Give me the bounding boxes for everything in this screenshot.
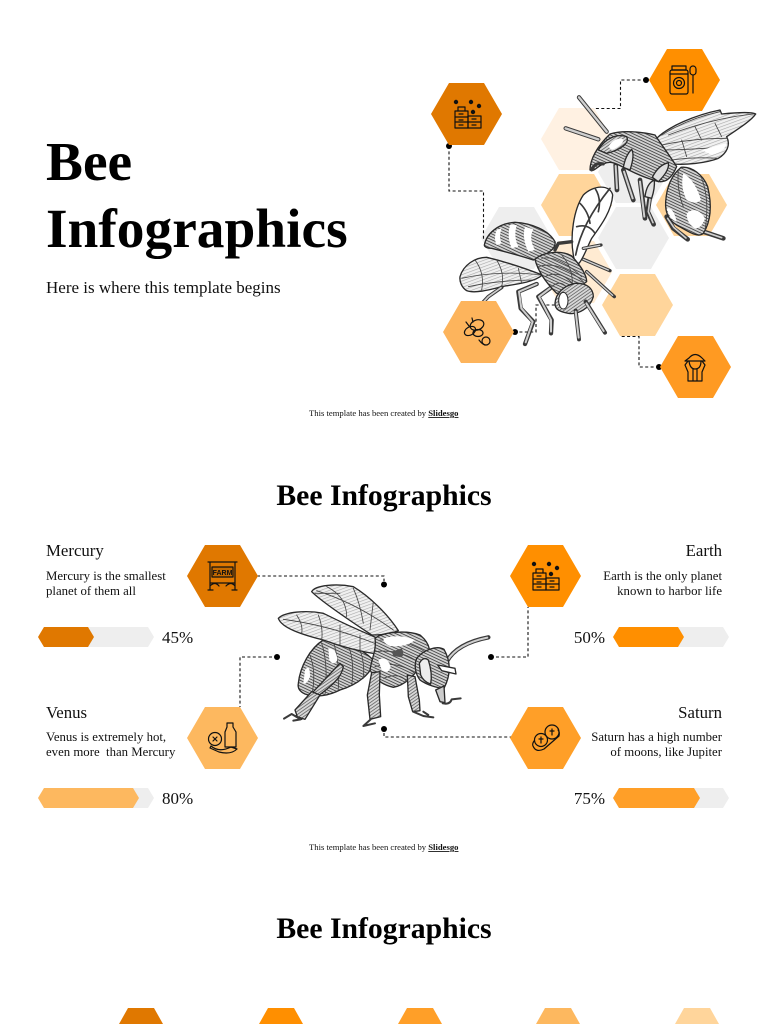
Venus hexagon with honey products icon <box>187 707 258 769</box>
Saturn percent: 75% <box>574 789 605 808</box>
slide title: Bee Infographics: Infographics <box>46 198 348 259</box>
hexagon with icon: hive boxes <box>431 83 502 145</box>
Earth name: Earth <box>686 541 723 560</box>
panel: Venus <box>38 703 258 808</box>
illustration: upper flying bee <box>566 97 756 239</box>
hexagon with icon: beekeeper <box>660 336 731 398</box>
footer credit, first slide: This template has been created by Slidesgo <box>309 408 458 418</box>
Saturn description: of moons, like Jupiter <box>610 745 723 759</box>
Saturn hexagon with honeycomb icon <box>510 707 581 769</box>
Mercury percent: 45% <box>162 628 193 647</box>
illustration: lower flying bee <box>460 187 614 344</box>
subtitle: Here is where this template begins <box>46 278 281 297</box>
panel: Mercury <box>38 541 258 647</box>
Mercury description: planet of them all <box>46 584 136 598</box>
hexagon with icon: honey jar and dipper <box>649 49 720 111</box>
Mercury hexagon with farm sign icon: FARM <box>213 570 233 577</box>
panel: Saturn <box>510 703 729 808</box>
Earth progress bar 50% <box>613 627 729 647</box>
hexagon with icon: bee <box>443 301 514 363</box>
heading: third slide: Bee Infographics <box>276 913 492 945</box>
Earth hexagon with hive boxes icon <box>510 545 581 607</box>
Venus percent: 80% <box>162 789 193 808</box>
connector lines, hero <box>446 77 662 370</box>
Venus name: Venus <box>46 703 87 722</box>
Venus description: even more than Mercury <box>46 745 176 759</box>
Saturn progress bar 75% <box>613 788 729 808</box>
row of hexagons, third slide <box>119 1008 719 1024</box>
honeycomb background hexagons <box>481 108 727 336</box>
Earth description: Earth is the only planet <box>603 569 722 583</box>
Saturn name: Saturn <box>678 703 723 722</box>
heading: second slide: Bee Infographics <box>276 480 492 512</box>
slide title: Bee Infographics: Bee <box>46 131 132 192</box>
Venus description: Venus is extremely hot, <box>46 730 166 744</box>
Mercury progress bar 45% <box>38 627 154 647</box>
connector lines, second slide <box>240 576 528 737</box>
Saturn description: Saturn has a high number <box>591 730 722 744</box>
illustration: central bee <box>278 585 488 726</box>
Mercury hexagon with farm sign icon <box>187 545 258 607</box>
Earth percent: 50% <box>574 628 605 647</box>
Venus progress bar 80% <box>38 788 154 808</box>
panel: Earth <box>510 541 729 647</box>
Mercury name: Mercury <box>46 541 104 560</box>
Earth description: known to harbor life <box>617 584 722 598</box>
Mercury description: Mercury is the smallest <box>46 569 166 583</box>
slide title: Bee Infographics <box>46 131 348 259</box>
footer credit, second slide: This template has been created by Slidesgo <box>309 842 458 852</box>
